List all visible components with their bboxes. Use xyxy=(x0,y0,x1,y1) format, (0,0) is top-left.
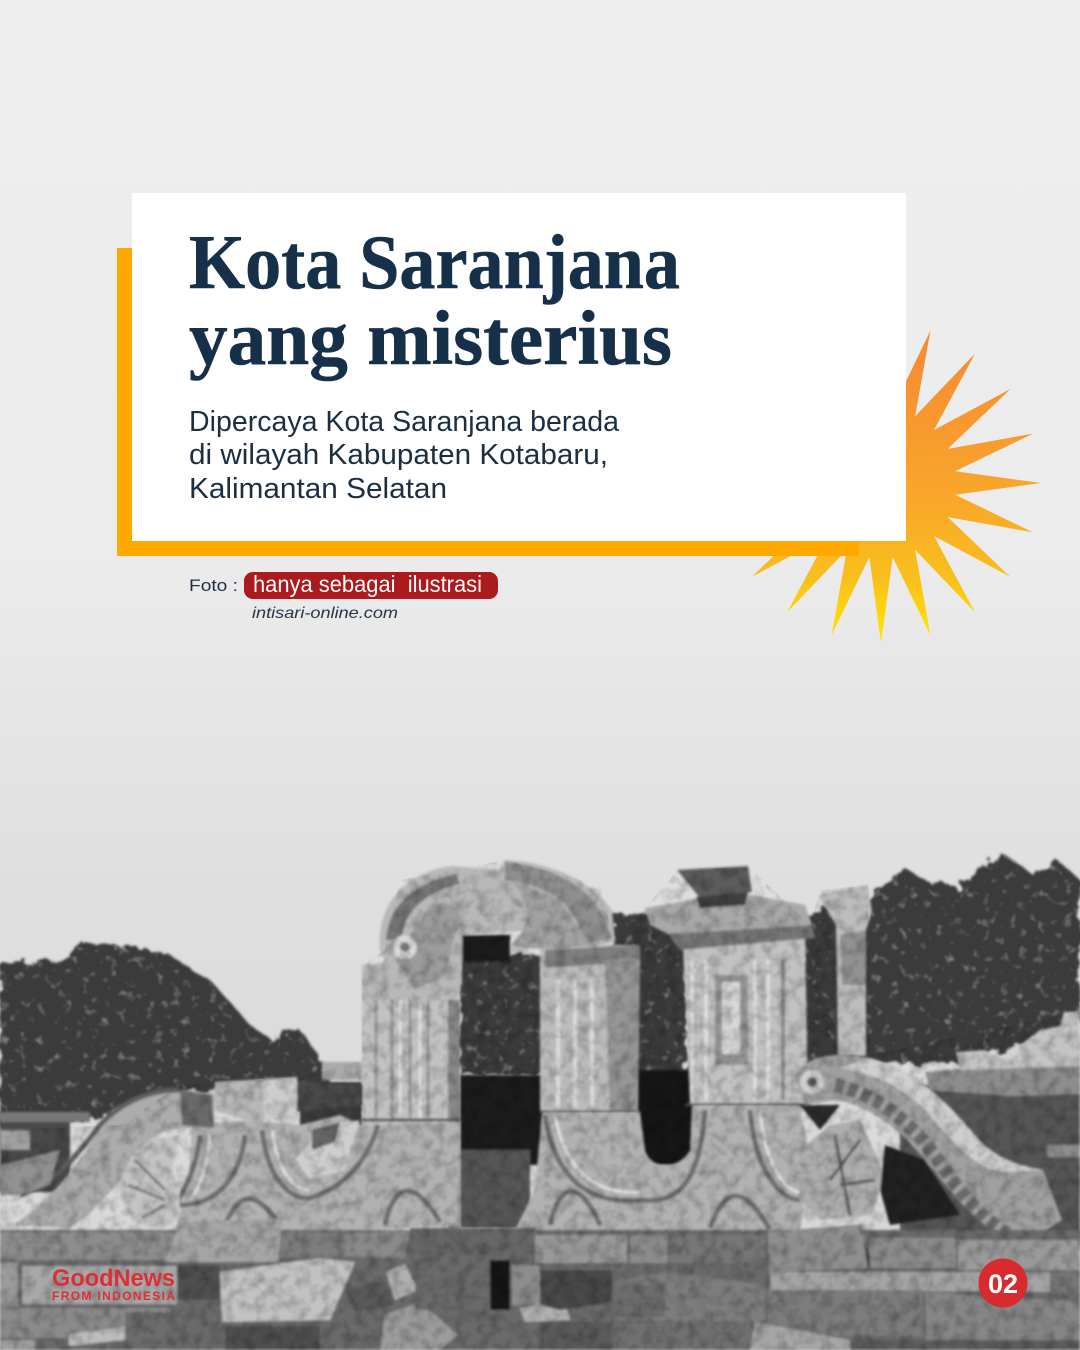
middle pillar xyxy=(540,945,640,1112)
subtitle: Dipercaya Kota Saranjana berada xyxy=(189,406,620,438)
title panel xyxy=(132,193,906,541)
credit source: intisari-online.com xyxy=(252,605,398,622)
carved swags xyxy=(178,1110,800,1230)
thin right column xyxy=(818,885,872,1056)
photo: right scroll xyxy=(795,1055,1062,1236)
photo: left scroll xyxy=(0,1077,362,1228)
title: Kota Saranjana xyxy=(189,219,680,305)
photo credit: Foto : xyxy=(189,576,238,595)
subtitle xyxy=(189,406,620,505)
right courses xyxy=(535,1235,627,1263)
left courses xyxy=(0,1232,175,1260)
photo: carved base aprons xyxy=(175,1105,810,1234)
right shell xyxy=(800,1120,885,1220)
logo: GoodNews from Indonesia: GoodNews xyxy=(52,1265,175,1292)
orange accent frame xyxy=(117,248,859,556)
photo: stone grain texture xyxy=(0,860,1080,1350)
left pillar xyxy=(362,965,460,1125)
logo: GoodNews from Indonesia: FROM INDONESIA xyxy=(52,1289,175,1303)
subtitle: di wilayah Kabupaten Kotabaru, xyxy=(189,439,608,471)
right pillar xyxy=(683,932,808,1105)
photo: trees xyxy=(0,850,1080,1130)
page number badge: 02 xyxy=(988,1269,1018,1299)
page number badge xyxy=(978,1258,1028,1308)
title: yang misterius xyxy=(189,295,672,381)
photo: right rear ground and stone slabs xyxy=(0,1012,1080,1245)
starburst xyxy=(721,323,1041,643)
photo: arch and pillars xyxy=(362,860,872,1230)
photo: stone ground courses xyxy=(0,1218,1080,1350)
photo credit xyxy=(189,571,498,622)
subtitle: Kalimantan Selatan xyxy=(189,473,447,505)
arch scroll pediment xyxy=(362,860,615,1000)
left shell xyxy=(121,1135,180,1228)
title xyxy=(189,219,680,381)
photo: hedge behind the arches xyxy=(460,1070,698,1228)
credit pill: hanya sebagai ilustrasi xyxy=(253,571,482,597)
photo: stone palace ruins xyxy=(0,850,1080,1350)
